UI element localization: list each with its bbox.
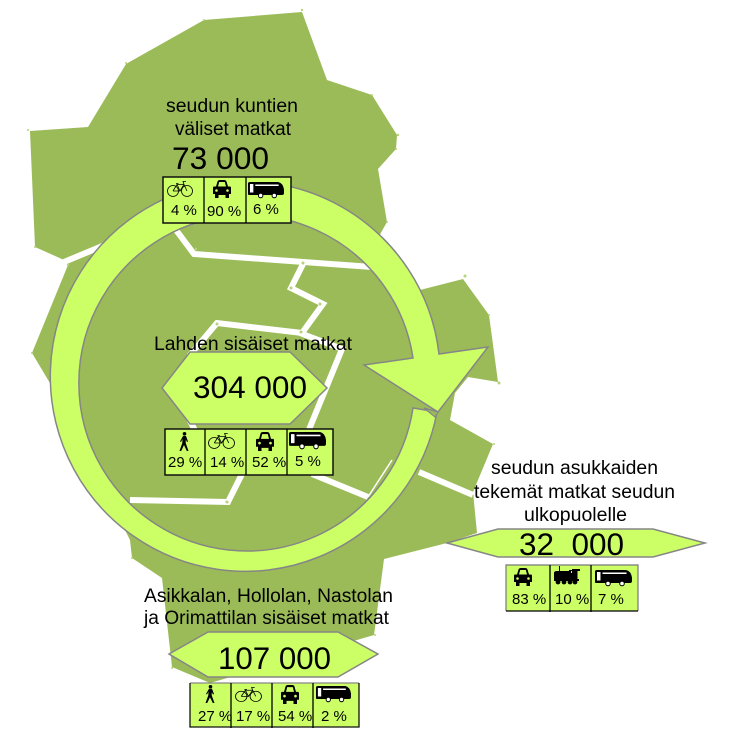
map of the region [27, 9, 500, 683]
mode share table: 54 % [278, 708, 312, 725]
mode share table: 27 % [198, 708, 232, 725]
panel: between municipalities [163, 96, 298, 223]
value hexagon: 32 000: 32 000 [519, 526, 624, 562]
heading: seudun asukkaiden tekemat matkat seudun ulkopuolelle: ulkopuolelle [524, 505, 627, 526]
mode share table: 2 % [321, 708, 347, 725]
heading: Asikkalan, Hollolan, Nastolan ja Orimattilan sisaiset matkat [143, 586, 393, 629]
panel: trips within the surrounding municipalities [143, 586, 393, 728]
mode share table: 83 % [512, 591, 546, 608]
value hexagon: 304 000 [162, 352, 327, 424]
value hexagon: 304 000: 304 000 [193, 369, 307, 405]
mode share table: 14 % [210, 454, 244, 471]
mode share table [506, 565, 638, 612]
mode share table [163, 177, 291, 223]
value: 73 000: 73 000 [172, 140, 269, 176]
panel: trips within Lahti [154, 334, 353, 475]
mode share table [165, 429, 333, 475]
mode share table [190, 683, 359, 728]
value hexagon: 107 000 [169, 632, 378, 677]
heading: Asikkalan, Hollolan, Nastolan ja Orimattilan sisaiset matkat: Asikkalan, Hollolan, Nastolan [144, 586, 393, 607]
value hexagon: 107 000: 107 000 [218, 640, 331, 676]
circular arrow [50, 181, 488, 571]
value hexagon: 32 000 [447, 526, 705, 562]
mode share table: 10 % [555, 591, 589, 608]
mode share table: 29 % [168, 454, 202, 471]
heading: seudun asukkaiden tekemat matkat seudun ulkopuolelle [474, 458, 675, 526]
mode share table: 90 % [207, 203, 241, 220]
heading: seudun kuntien valiset matkat [166, 96, 298, 140]
mode share table: 52 % [252, 454, 286, 471]
mode share table: 6 % [253, 201, 279, 218]
heading: Lahden sisaiset matkat: Lahden sisäiset matkat [154, 334, 353, 355]
heading: Asikkalan, Hollolan, Nastolan ja Orimattilan sisaiset matkat: ja Orimattilan sisäiset matkat [143, 608, 390, 629]
panel: trips outside the region [447, 458, 705, 612]
mode share table: 7 % [598, 591, 624, 608]
heading: seudun kuntien valiset matkat: väliset matkat [175, 119, 292, 140]
mode share table: 17 % [236, 708, 270, 725]
heading: seudun kuntien valiset matkat: seudun kuntien [166, 96, 298, 117]
mode share table: 4 % [171, 202, 197, 219]
mode share table: 5 % [295, 453, 321, 470]
heading: seudun asukkaiden tekemat matkat seudun ulkopuolelle: tekemät matkat seudun [474, 482, 675, 503]
heading: seudun asukkaiden tekemat matkat seudun ulkopuolelle: seudun asukkaiden [491, 458, 658, 479]
